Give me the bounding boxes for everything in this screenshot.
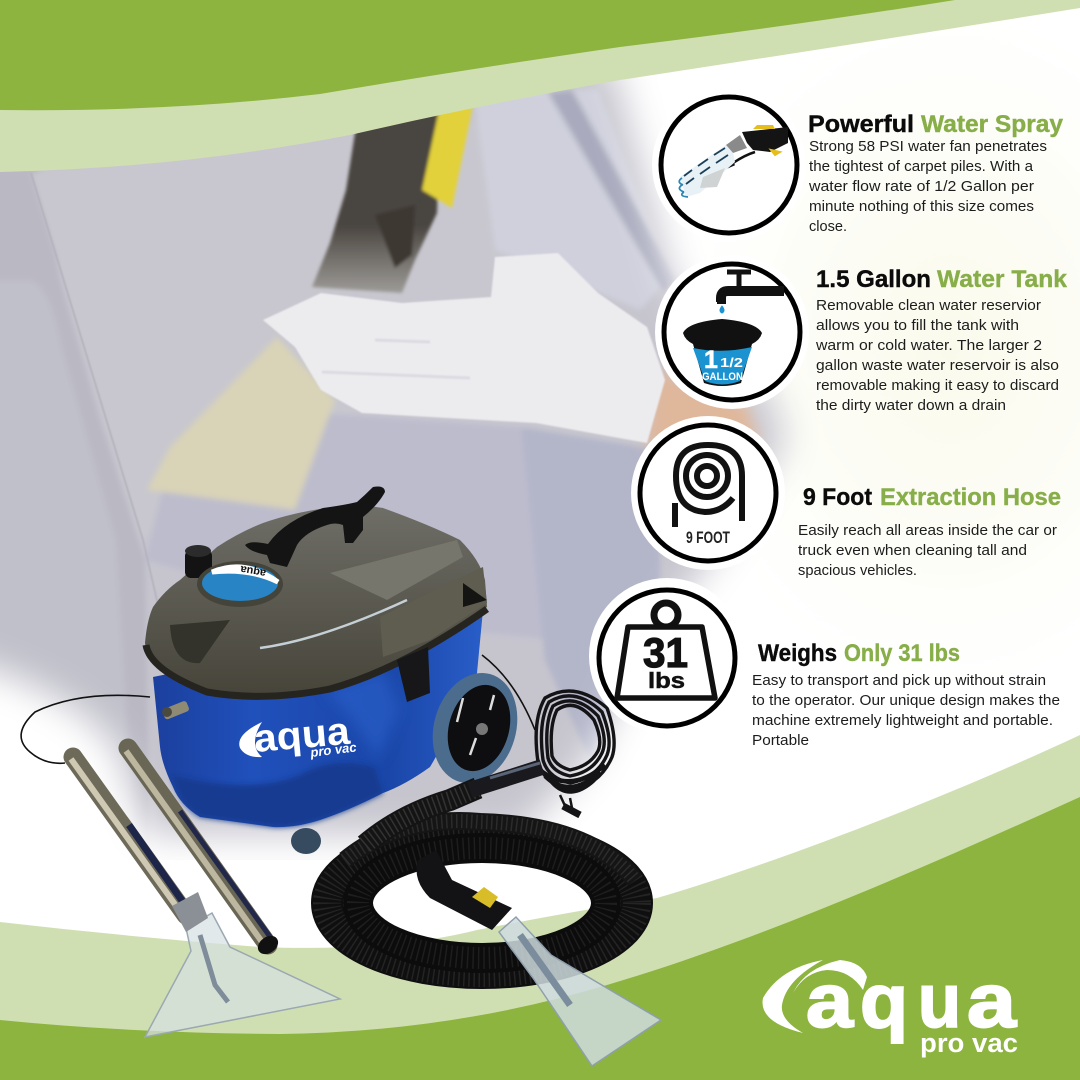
logo wordmark <box>806 959 1017 1044</box>
power cable <box>21 695 150 763</box>
body text <box>808 139 1047 235</box>
icon: spray wand in circle <box>652 88 806 242</box>
seat panels <box>0 90 676 860</box>
carry handle <box>245 487 385 567</box>
clear nozzle wide <box>145 892 340 1037</box>
clear nozzle narrow <box>499 917 661 1066</box>
body text: water flow rate of 1/2 Gallon per <box>808 179 1034 195</box>
wheel <box>420 663 530 793</box>
blue body <box>153 610 483 827</box>
body text: Strong 58 PSI water fan penetrates <box>809 139 1047 155</box>
heading: 1.5 Gallon <box>816 266 931 293</box>
coiled hose <box>327 763 637 973</box>
heading: Powerful <box>808 111 914 138</box>
top dark green wave <box>0 0 955 110</box>
bottom light green wave <box>0 735 1080 1080</box>
machine logo: pro vac <box>309 739 358 760</box>
feature: extraction hose <box>631 416 1061 579</box>
heading: Extraction Hose <box>880 484 1061 511</box>
logo swoosh inner <box>793 960 867 993</box>
icon: 31 lbs weight in circle: 31 <box>643 629 688 676</box>
power cable right <box>482 655 535 730</box>
feature: powerful water spray <box>652 88 1064 242</box>
logo tagline: pro vac <box>920 1028 1018 1058</box>
body text: removable making it easy to discard <box>816 378 1059 394</box>
body text: close. <box>809 219 847 235</box>
lid highlight <box>260 600 407 648</box>
white glove <box>263 253 665 443</box>
body text: the dirty water down a drain <box>816 398 1006 414</box>
body text: spacious vehicles. <box>798 563 917 579</box>
logo wordmark: a <box>967 959 1017 1044</box>
lid side box <box>380 567 487 657</box>
heading: Only 31 lbs <box>844 640 960 667</box>
body text <box>815 298 1059 414</box>
body text: Portable <box>752 733 809 749</box>
body text: warm or cold water. The larger 2 <box>815 338 1042 354</box>
pale cream wash behind text <box>680 10 1080 690</box>
icon: tap and bucket in circle <box>655 255 809 409</box>
brass connector <box>162 700 190 720</box>
arm <box>640 366 762 450</box>
body text: gallon waste water reservoir is also <box>816 358 1059 374</box>
icon: tap and bucket in circle: GALLON <box>702 371 743 383</box>
feature: weight <box>589 578 1060 749</box>
body text: the tightest of carpet piles. With a <box>809 159 1034 175</box>
bottom dark green wave <box>0 797 1080 1080</box>
body text: truck even when cleaning tall and <box>798 543 1027 559</box>
product: extractor machine <box>21 487 661 1066</box>
heading: Water Tank <box>937 266 1068 293</box>
round blue label <box>197 561 283 607</box>
steel wand 2 <box>126 748 282 958</box>
logo wordmark: a <box>806 959 854 1044</box>
smoked lid <box>145 506 487 697</box>
photo: car seat being cleaned <box>0 60 820 860</box>
icon: hose coil in circle: 9 FOOT <box>686 528 730 547</box>
icon: tap and bucket in circle: 1/2 <box>720 355 743 370</box>
body highlight <box>325 670 400 760</box>
black latch <box>397 647 430 702</box>
round blue label: aqua <box>239 563 267 579</box>
black cap <box>185 545 212 578</box>
icon: tap and bucket in circle: 1 <box>704 346 718 374</box>
icon: hose coil in circle <box>631 416 785 570</box>
machine logo: aqua <box>252 710 352 761</box>
front vent <box>170 620 230 663</box>
body text: to the operator. Our unique design makes the <box>752 693 1060 709</box>
body text: Removable clean water reservior <box>816 298 1041 314</box>
dark rim <box>146 609 487 696</box>
top light green wave <box>0 0 1080 172</box>
body text <box>798 523 1057 579</box>
seam lines <box>31 174 158 602</box>
logo wordmark: u <box>918 959 961 1044</box>
body shading <box>172 763 383 827</box>
extraction tool <box>312 105 473 293</box>
heading: Weighs <box>758 640 837 667</box>
lid top panel <box>330 540 463 600</box>
body text <box>752 673 1060 749</box>
icon: 31 lbs weight in circle: lbs <box>648 668 685 693</box>
heading: 9 Foot <box>803 484 872 511</box>
feature: water tank <box>655 255 1068 414</box>
body text: allows you to fill the tank with <box>816 318 1019 334</box>
caster wheel <box>291 828 321 854</box>
logo swoosh <box>762 960 823 1033</box>
body text: Easy to transport and pick up without strain <box>752 673 1046 689</box>
side pocket <box>463 583 487 607</box>
logo wordmark: q <box>860 959 908 1044</box>
steel wand 1 <box>71 757 190 917</box>
body text: minute nothing of this size comes <box>809 199 1034 215</box>
icon: 31 lbs weight in circle <box>589 578 745 734</box>
hose wand handle <box>416 850 512 930</box>
body text: Easily reach all areas inside the car or <box>798 523 1057 539</box>
cleaning cloth <box>147 337 335 510</box>
heading: Water Spray <box>921 111 1064 138</box>
logo: aqua pro vac <box>762 959 1018 1058</box>
seat upholstery <box>38 78 798 854</box>
body text: machine extremely lightweight and portable. <box>752 713 1053 729</box>
coiled power cord <box>536 691 614 815</box>
